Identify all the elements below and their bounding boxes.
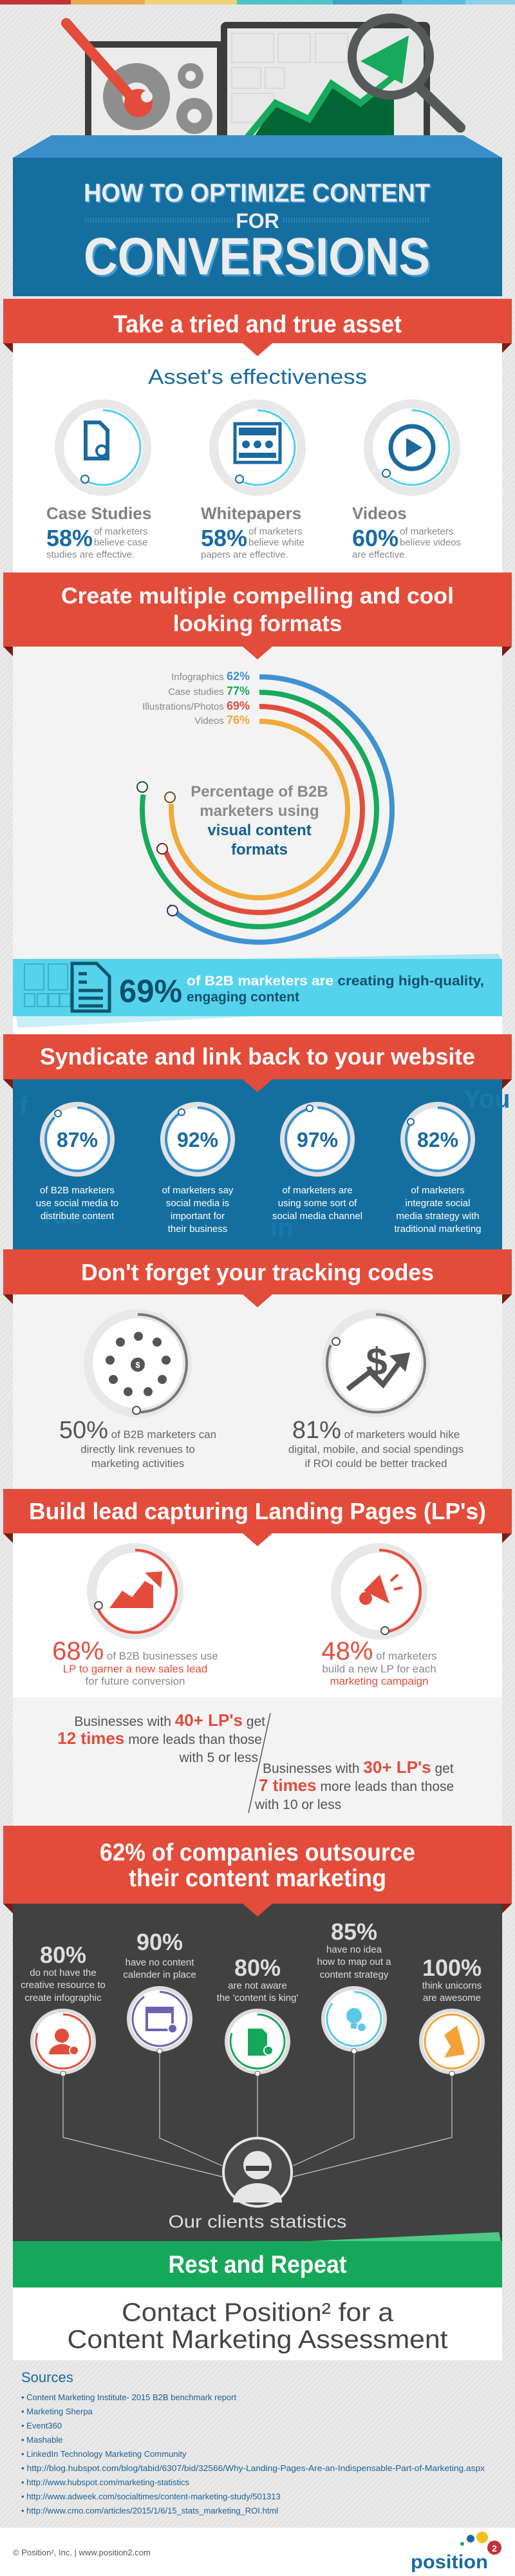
stat: 81% [288,1417,464,1470]
stat: videos: Videos [352,504,407,523]
title banner: HOW TO OPTIMIZE CONTENT [85,180,431,209]
stat: 87%: use social media to [36,1198,118,1209]
stat: 80% not aware content is king [217,1955,298,2076]
logo: position2: 2 [492,2543,497,2553]
stat: videos: believe videos [400,537,461,548]
text: percentage of B2B marketers [191,783,328,858]
text: 30+ LP's 7 times [254,1757,454,1812]
stat: 50%: marketing activities [91,1457,184,1470]
callout: 69% high quality content: 69% [119,973,182,1009]
stat: 100% unicorns: are awesome [423,1993,481,2003]
text: 40+ LP's 12 times: Businesses with 40+ LP's get [74,1710,265,1730]
stat: 100% unicorns: think unicorns [422,1980,482,1991]
icon: ROI dollar circle [322,1309,430,1417]
stat: 80% not aware content is king: are not aware [228,1980,287,1991]
banner: create multiple formats: Create multiple compelling and cool [61,583,454,609]
text: percentage of B2B marketers: Percentage of B2B [191,783,328,800]
stat: case studies: believe case [94,537,147,548]
stat: 92%: important for [171,1211,225,1222]
icon: videos circle [368,404,456,491]
stat: 80% no creative resource: 80% [40,1942,86,1968]
stat: 97%: 97% [297,1128,338,1151]
stat: 90% no content calendar: 90% [136,1929,183,1955]
sources list: • Marketing Sherpa [21,2407,93,2416]
stat: 82% [394,1102,482,1235]
stat: 92%: their business [168,1224,227,1235]
stat: 92%: social media is [166,1198,229,1209]
stat: 97%: using some sort of [278,1198,357,1209]
stat: 85% no content strategy: have no idea [326,1944,382,1955]
sources list: • LinkedIn Technology Marketing Community [21,2449,187,2459]
text: 30+ LP's 7 times: 7 times more leads than those [259,1776,454,1795]
text: 40+ LP's 12 times [57,1710,265,1765]
title banner: CONVERSIONS [86,229,432,288]
icon: documents [24,963,109,1011]
title banner [13,135,502,296]
stat: whitepapers: of marketers [248,526,302,537]
banner: syndicate and link back: Syndicate and link back to your website [40,1043,475,1070]
callout: contact position2 [13,2287,502,2360]
panel: syndicate: f [399,1201,408,1229]
stat: 48% [321,1637,437,1687]
stat: whitepapers: believe white [248,537,304,548]
icon: magnifier [352,18,460,128]
sources list: • http://blog.hubspot.com/blog/tabid/6307/bid/32566/Why-Landing-Pages-Are-an-Indispensable-Part-of-Marketing.aspx [21,2463,485,2473]
text: 30+ LP's 7 times: Businesses with 30+ LP's get [263,1757,454,1777]
callout: 69% high quality content: of B2B marketers are creating high-quality, [187,974,484,989]
stat: whitepapers: 58% [201,525,247,551]
banner: 62% of companies outsource: their content marketing [129,1865,386,1892]
text: our clients statistics: Our clients statistics [169,2211,346,2231]
sources list: • Mashable [21,2435,63,2445]
stat: 82%: media strategy with [396,1211,480,1222]
icon: ROI dollar circle: $ [366,1340,388,1383]
banner: rest and repeat: Rest and Repeat [169,2251,347,2278]
banner: build lead capturing landing pages: Build lead capturing Landing Pages (LP's) [29,1498,486,1524]
stat: 92%: 92% [177,1128,218,1151]
chart: green growth [245,35,409,144]
icon: wrench [66,23,153,117]
stat: 81%: digital, mobile, and social spendings [288,1443,464,1455]
banner: build lead capturing landing pages [3,1489,512,1546]
icon: whitepapers circle [214,404,301,491]
text: percentage of B2B marketers: marketers using [200,802,319,820]
stat: 82%: traditional marketing [394,1224,482,1235]
stat: 92%: of marketers say [162,1185,234,1196]
stat: case studies: of marketers [94,526,147,537]
panel: landing pages [3,1489,512,1826]
sources list: • Event360 [21,2421,62,2430]
panel: asset effectiveness [3,299,512,573]
footer: © Position², Inc. | www.position2.com [13,2548,151,2557]
stat: 87%: distribute content [41,1211,115,1222]
stat: 92% [160,1102,235,1235]
text: 30+ LP's 7 times: with 10 or less [254,1797,341,1812]
title banner: HOW TO OPTIMIZE CONTENT [84,179,430,207]
stat: 87%: of B2B marketers [40,1185,115,1196]
stat: videos: of marketers [400,526,453,537]
stat: 85% no content strategy: how to map out a [317,1956,391,1967]
stat: 90% no content calendar: have no content [126,1957,194,1968]
banner: take a tried and true asset: Take a tried and true asset [113,311,402,338]
stat: 50% [59,1417,216,1470]
stat: 85% no content strategy: 85% [331,1918,377,1945]
stat: 82%: integrate social [406,1198,470,1209]
stat: whitepapers [201,504,304,560]
callout: 69% high quality content: engaging content [187,990,299,1005]
footer [0,2528,515,2576]
callout: 69% high quality content [13,954,502,1036]
stat: whitepapers: Whitepapers [201,504,301,523]
legend: format percentages: Infographics 62% [171,670,250,683]
icon: client avatar [223,2138,292,2206]
stat: 80% no creative resource [21,1942,106,2076]
stat: 90% no content calendar [123,1929,196,2054]
sources list [21,2369,485,2515]
panel: syndicate [3,1034,512,1249]
text: percentage of B2B marketers: visual content [207,822,312,839]
panel: syndicate: in [270,1214,294,1242]
stat: 97% [272,1102,362,1222]
legend: format percentages [142,670,250,726]
stat: 68% [52,1637,218,1687]
legend: format percentages: Case studies 77% [168,685,250,697]
text: percentage of B2B marketers: formats [231,841,288,858]
chart: concentric arcs [127,677,392,942]
sources list: • Content Marketing Institute- 2015 B2B benchmark report [21,2392,236,2402]
icon: megaphone circle [331,1543,427,1640]
stat: 97%: of marketers are [282,1185,353,1196]
stat: 97%: social media channel [272,1211,362,1222]
stat: 81%: 81% of marketers would hike [292,1417,460,1444]
banner: take a tried and true asset [3,299,512,356]
banner: create multiple formats [3,573,512,659]
banner: don't forget tracking codes [3,1249,512,1307]
icon: growth chart circle [87,1543,183,1640]
stat: 100% unicorns [421,1955,483,2076]
stat: 85% no content strategy: content strategy [320,1969,389,1980]
top color stripe [0,0,515,5]
panel: outsource content marketing [3,1826,512,2241]
icon: gears [103,63,212,134]
stat: 81%: if ROI could be better tracked [304,1457,447,1470]
stat: case studies [46,504,151,560]
stat: 82%: of marketers [411,1185,465,1196]
stat: 100% unicorns: 100% [422,1955,482,1981]
callout: contact position2: Content Marketing Assessment [67,2325,448,2354]
heading: asset's effectiveness: Asset's effectiveness [148,365,367,388]
connector lines [63,2051,452,2177]
stat: 48%: 48% of marketers [321,1637,437,1665]
panel: syndicate: You [464,1085,510,1113]
panel: tracking codes [3,1249,512,1489]
stat: 80% not aware content is king: 80% [234,1955,281,1981]
stat: case studies: studies are effective. [46,549,135,560]
stat: 87%: 87% [57,1128,98,1151]
icon: case studies circle [59,404,147,491]
text: 40+ LP's 12 times: 12 times more leads than those [57,1728,262,1748]
logo: position2 [411,2532,501,2573]
stat: 80% no creative resource: create infographic [24,1993,102,2003]
icon: revenue network circle [84,1309,192,1417]
banner: don't forget tracking codes: Don't forget your tracking codes [81,1259,434,1285]
stat: 48%: build a new LP for each [322,1663,436,1675]
title banner: CONVERSIONS [84,227,430,286]
legend: format percentages: Illustrations/Photos 69% [142,699,250,712]
icon: revenue network circle: $ [135,1360,140,1370]
stat: case studies: 58% [46,525,93,551]
panel: formats [3,573,512,1039]
stat: videos [352,504,461,560]
stat: 85% no content strategy [317,1918,391,2054]
stat: whitepapers: papers are effective. [201,549,288,560]
stat: 80% no creative resource: creative resource to [21,1980,106,1991]
panel: syndicate: Tube [39,1201,98,1229]
banner: 62% of companies outsource: 62% of companies outsource [100,1839,415,1866]
stat: videos: are effective. [352,549,407,560]
legend: format percentages: Videos 76% [194,714,250,726]
logo: position2: position [411,2552,488,2573]
stat: videos: 60% [352,525,398,551]
sources list: • http://www.cmo.com/articles/2015/1/6/15_stats_marketing_ROI.html [21,2506,278,2515]
stat: 80% not aware content is king: the 'content is king' [217,1993,298,2003]
stat: 68%: LP to garner a new sales lead [63,1663,207,1675]
banner: syndicate and link back [3,1034,512,1092]
stat: 90% no content calendar: calender in place [123,1969,196,1980]
sources list: • http://www.hubspot.com/marketing-statistics [21,2477,190,2487]
panel: syndicate: f [19,1092,28,1120]
stat: case studies: Case Studies [46,504,151,523]
stat: 50%: 50% of B2B marketers can [59,1417,216,1444]
banner: create multiple formats: looking formats [173,611,342,636]
text: 40+ LP's 12 times: with 5 or less [178,1750,258,1765]
title banner: FOR [236,209,279,232]
sources list: Sources [21,2369,73,2385]
stat: 48%: marketing campaign [330,1675,429,1687]
stat: 68%: for future conversion [86,1675,185,1687]
stat: 87% [36,1102,118,1222]
banner: rest and repeat [13,2232,502,2297]
sources list: • http://www.adweek.com/socialtimes/content-marketing-study/501313 [21,2492,281,2501]
stat: 82%: 82% [417,1128,458,1151]
stat: 50%: directly link revenues to [80,1443,195,1455]
stat: 80% no creative resource: do not have the [30,1967,97,1978]
stat: 68%: 68% of B2B businesses use [52,1637,218,1665]
callout: contact position2: Contact Position² for a [122,2298,394,2327]
banner: 62% of companies outsource [3,1826,512,1917]
hero illustration [66,18,460,150]
